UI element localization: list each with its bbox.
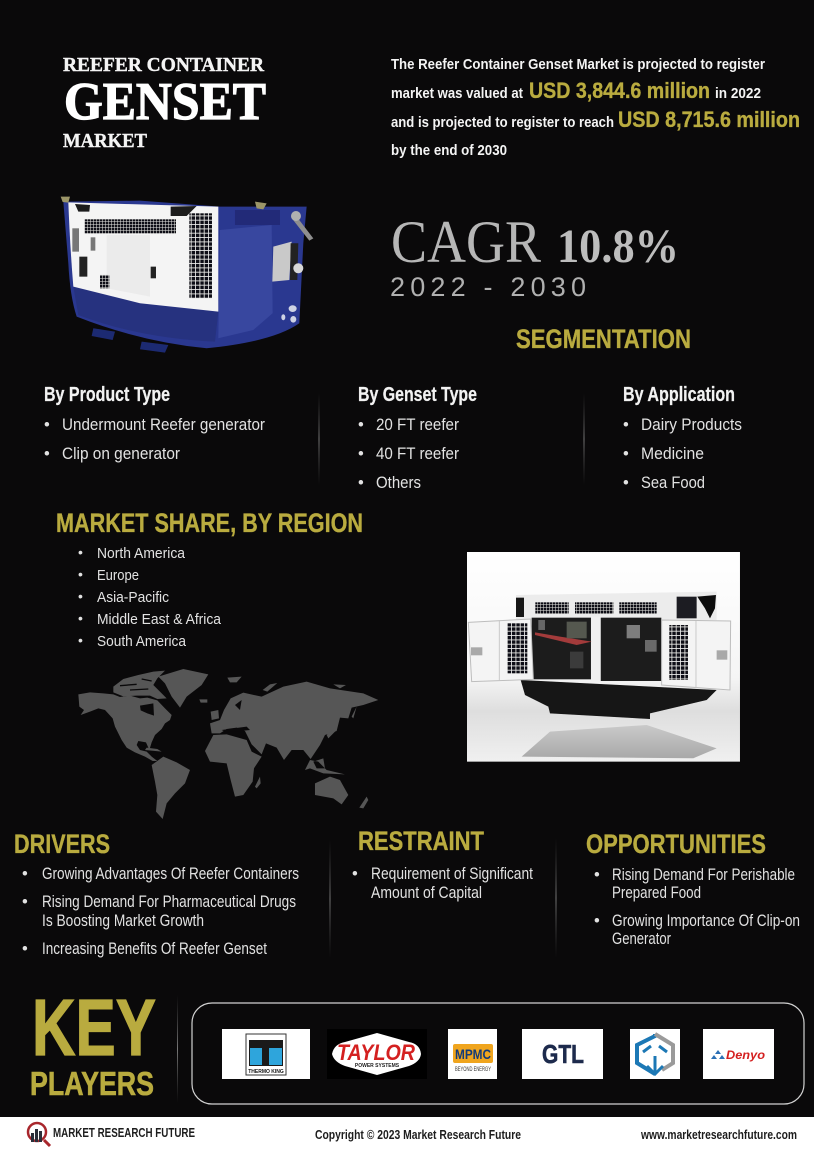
segment: by application: • xyxy=(623,416,629,434)
logo: Thermo King xyxy=(222,1029,310,1079)
panel: opportunities: OPPORTUNITIES xyxy=(586,829,766,859)
title: GENSET xyxy=(64,73,266,131)
footer xyxy=(0,1117,814,1150)
CAGR: CAGR xyxy=(391,209,541,275)
title: REEFER CONTAINER xyxy=(63,54,265,76)
logo: Denyo xyxy=(703,1029,774,1079)
logo: Taylor xyxy=(327,1029,427,1079)
panel: key player logos xyxy=(192,1003,804,1104)
panel: opportunities xyxy=(586,829,800,948)
panel: drivers: Rising Demand For Pharmaceutical Drugs xyxy=(42,893,296,911)
logo: GTL: GTL xyxy=(542,1039,584,1069)
segment: by genset type: • xyxy=(358,416,364,434)
panel: drivers: • xyxy=(22,940,28,958)
heading: key players xyxy=(30,983,156,1102)
segment: by genset type: • xyxy=(358,474,364,492)
market summary text: and is projected to register to reach xyxy=(391,114,614,131)
panel: restraint: Amount of Capital xyxy=(371,884,482,902)
panel: drivers: Increasing Benefits Of Reefer Genset xyxy=(42,940,267,958)
segment: by product type: Undermount Reefer generator xyxy=(62,416,265,434)
region list: • xyxy=(78,588,83,604)
logo: MPMC xyxy=(448,1029,497,1079)
panel: opportunities: Prepared Food xyxy=(612,884,701,902)
panel: drivers: Growing Advantages Of Reefer Containers xyxy=(42,865,299,883)
region list xyxy=(78,544,222,650)
icon: market research future logo xyxy=(28,1123,50,1146)
region list: Europe xyxy=(97,567,139,584)
segment: by product type xyxy=(44,384,265,463)
segment: by genset type: Others xyxy=(376,474,421,492)
heading: segmentation: SEGMENTATION xyxy=(516,324,691,354)
logo: MPMC: BEYOND ENERGY xyxy=(455,1067,491,1073)
segment: by product type: Clip on generator xyxy=(62,445,180,463)
segment: by genset type: By Genset Type xyxy=(358,384,477,406)
logo: hexagon mark xyxy=(630,1029,680,1079)
panel: drivers: Is Boosting Market Growth xyxy=(42,912,204,930)
logo: Taylor: POWER SYSTEMS xyxy=(355,1063,400,1069)
region list: Middle East & Africa xyxy=(97,611,222,628)
genset photo: open enclosure generator xyxy=(467,552,740,762)
segment: by application: Dairy Products xyxy=(641,416,742,434)
market summary text: The Reefer Container Genset Market is projected to register xyxy=(391,56,765,73)
CAGR xyxy=(390,209,679,302)
region list: Asia-Pacific xyxy=(97,589,169,606)
panel: restraint: • xyxy=(352,865,358,883)
market summary text: by the end of 2030 xyxy=(391,142,507,159)
heading: key players: PLAYERS xyxy=(30,1065,154,1102)
segment: by application: • xyxy=(623,474,629,492)
segment: by application: Sea Food xyxy=(641,474,705,492)
segment: by genset type xyxy=(358,384,477,492)
panel: restraint: RESTRAINT xyxy=(358,826,484,856)
segment: by product type: • xyxy=(44,416,50,434)
logo: Taylor: TAYLOR xyxy=(337,1040,415,1065)
panel: drivers xyxy=(14,829,299,958)
segment: by genset type: • xyxy=(358,445,364,463)
panel: drivers: DRIVERS xyxy=(14,829,110,859)
footer: Copyright © 2023 Market Research Future xyxy=(315,1128,521,1142)
title xyxy=(63,54,266,152)
logo: MPMC: MPMC xyxy=(455,1046,491,1062)
panel: drivers: • xyxy=(22,893,28,911)
segment: by product type: • xyxy=(44,445,50,463)
region list: • xyxy=(78,632,83,648)
region list: • xyxy=(78,566,83,582)
panel: opportunities: • xyxy=(594,912,600,930)
panel: restraint: Requirement of Significant xyxy=(371,865,533,883)
market summary text: market was valued at xyxy=(391,85,523,102)
title: MARKET xyxy=(63,130,148,152)
panel: drivers: • xyxy=(22,865,28,883)
genset photo: blue reefer generator xyxy=(61,197,313,353)
market summary text: USD 3,844.6 million xyxy=(529,78,710,103)
heading: key players: KEY xyxy=(32,983,156,1072)
segment: by application: Medicine xyxy=(641,445,704,463)
segment: by genset type: 40 FT reefer xyxy=(376,445,459,463)
segment: by application: By Application xyxy=(623,384,735,406)
region list: North America xyxy=(97,545,186,562)
segment: by genset type: 20 FT reefer xyxy=(376,416,459,434)
panel: opportunities: Generator xyxy=(612,930,671,948)
logo: Thermo King: THERMO KING xyxy=(248,1069,284,1075)
segment: by product type: By Product Type xyxy=(44,384,170,406)
footer: MARKET RESEARCH FUTURE xyxy=(53,1126,195,1140)
logo: Denyo: Denyo xyxy=(726,1048,765,1062)
world map xyxy=(78,669,378,819)
region list: • xyxy=(78,544,83,560)
panel: restraint xyxy=(352,826,533,902)
segment: by application xyxy=(623,384,742,492)
region list: South America xyxy=(97,633,187,650)
CAGR: 2022 - 2030 xyxy=(390,272,586,302)
segment: by application: • xyxy=(623,445,629,463)
CAGR: 10.8% xyxy=(557,220,679,273)
heading: market share by region: MARKET SHARE, BY REGION xyxy=(56,508,363,538)
logo: GTL xyxy=(522,1029,603,1079)
region list: • xyxy=(78,610,83,626)
panel: opportunities: • xyxy=(594,866,600,884)
market summary text: in 2022 xyxy=(715,85,761,102)
market summary text xyxy=(391,56,800,159)
